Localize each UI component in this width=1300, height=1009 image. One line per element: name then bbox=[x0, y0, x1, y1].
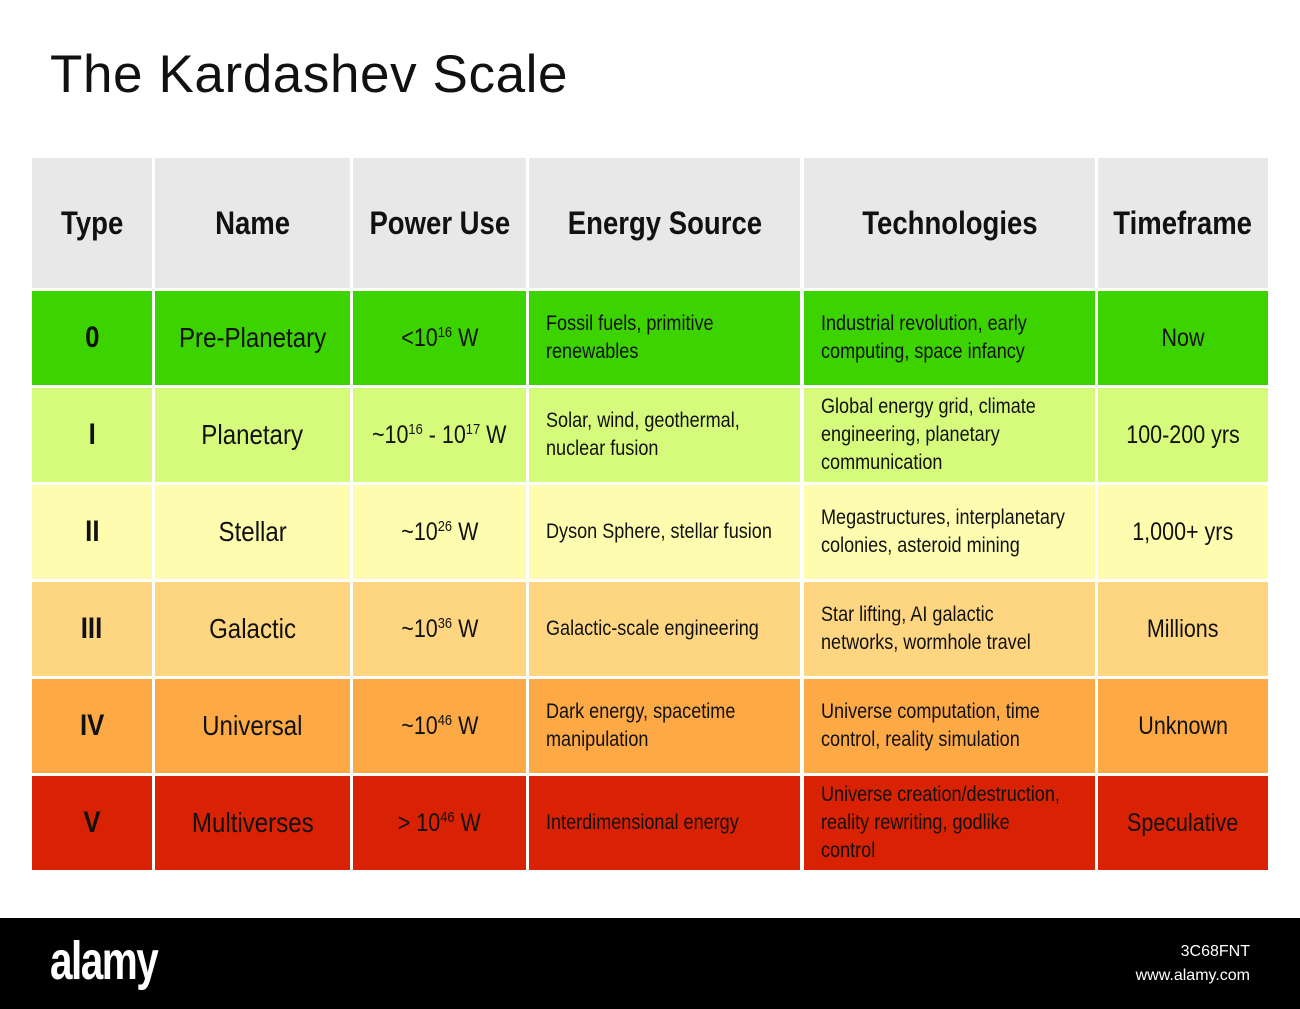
table: control bbox=[821, 839, 875, 862]
table: Galactic bbox=[209, 613, 296, 644]
table: Stellar bbox=[218, 516, 287, 547]
table: 0 bbox=[85, 321, 99, 354]
row: type III bbox=[32, 582, 1268, 676]
table: III bbox=[81, 612, 103, 645]
table: Now bbox=[1161, 324, 1204, 352]
table: Dyson Sphere, stellar fusion bbox=[546, 520, 772, 543]
table: manipulation bbox=[546, 728, 648, 751]
row: type I bbox=[32, 388, 1268, 482]
table: computing, space infancy bbox=[821, 340, 1025, 363]
table: 100-200 yrs bbox=[1126, 420, 1240, 448]
table: ~1036 W bbox=[401, 614, 478, 642]
table: networks, wormhole travel bbox=[821, 631, 1031, 654]
table: I bbox=[88, 418, 96, 451]
table: engineering, planetary bbox=[821, 423, 1000, 446]
image id text: www.alamy.com bbox=[1136, 967, 1250, 984]
table: Dark energy, spacetime bbox=[546, 700, 735, 723]
table: Timeframe bbox=[1114, 204, 1252, 240]
table: control, reality simulation bbox=[821, 728, 1020, 751]
table: Power Use bbox=[369, 204, 510, 240]
image id text: 3C68FNT bbox=[1181, 943, 1250, 960]
row: type IV bbox=[32, 679, 1268, 773]
table: ~1046 W bbox=[401, 712, 478, 740]
table: nuclear fusion bbox=[546, 437, 658, 460]
table: Industrial revolution, early bbox=[821, 312, 1027, 335]
table: Galactic-scale engineering bbox=[546, 617, 759, 640]
row: type 0 bbox=[32, 291, 1268, 385]
table: 1,000+ yrs bbox=[1133, 518, 1233, 546]
image id text bbox=[1136, 943, 1250, 984]
table: ~1016 - 1017 W bbox=[372, 420, 507, 448]
title: The Kardashev Scale bbox=[50, 45, 568, 104]
table: Type bbox=[61, 204, 123, 240]
table: Universe computation, time bbox=[821, 700, 1040, 723]
table: Millions bbox=[1147, 614, 1219, 642]
table: > 1046 W bbox=[398, 808, 481, 836]
table: <1016 W bbox=[401, 324, 478, 352]
table: Global energy grid, climate bbox=[821, 395, 1036, 418]
row: type V bbox=[32, 776, 1268, 870]
table: Universal bbox=[202, 710, 303, 741]
table: Solar, wind, geothermal, bbox=[546, 409, 740, 432]
table: colonies, asteroid mining bbox=[821, 534, 1020, 557]
table: Unknown bbox=[1138, 712, 1228, 740]
table: Megastructures, interplanetary bbox=[821, 506, 1065, 529]
table: V bbox=[83, 806, 101, 839]
table: reality rewriting, godlike bbox=[821, 811, 1010, 834]
table: Energy Source bbox=[567, 204, 762, 240]
footer band bbox=[0, 918, 1300, 1009]
table: IV bbox=[80, 709, 104, 742]
table: Technologies bbox=[862, 204, 1037, 240]
row: type II bbox=[32, 485, 1268, 579]
table: Interdimensional energy bbox=[546, 811, 739, 834]
table: Star lifting, AI galactic bbox=[821, 603, 994, 626]
table: ~1026 W bbox=[401, 518, 478, 546]
table: Universe creation/destruction, bbox=[821, 783, 1060, 806]
table: Multiverses bbox=[192, 807, 313, 838]
table: II bbox=[85, 515, 99, 548]
table: Pre-Planetary bbox=[179, 322, 326, 353]
table: renewables bbox=[546, 340, 638, 363]
table: Planetary bbox=[202, 419, 303, 450]
table: Fossil fuels, primitive bbox=[546, 312, 714, 335]
table: communication bbox=[821, 451, 942, 474]
table: Speculative bbox=[1127, 808, 1239, 836]
header row bbox=[32, 158, 1268, 288]
logo: alamy: alamy bbox=[50, 931, 157, 991]
table: Name bbox=[215, 204, 290, 240]
